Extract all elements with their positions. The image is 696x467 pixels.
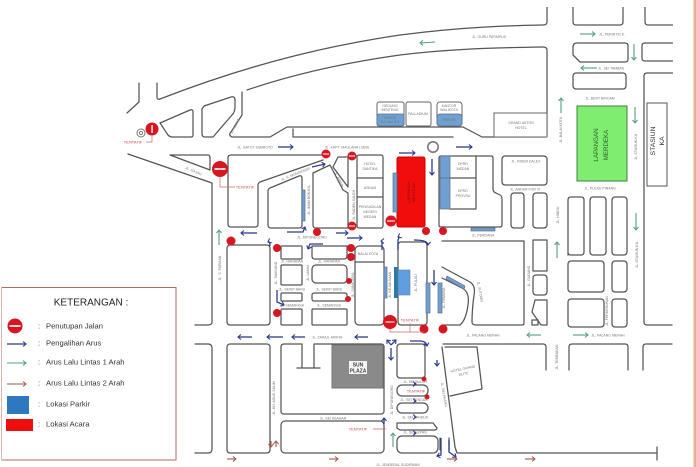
legend: road closure: [8, 318, 103, 334]
street labels: JL. PALANG MERAH: [591, 334, 625, 338]
building: Hotel Santika: SANTIKA: [363, 167, 378, 171]
street labels: JL. SEPAT: [229, 118, 241, 135]
green field: Lapangan Merdeka: LAPANGAN: [593, 128, 600, 162]
street labels: JL. PULAU: [414, 274, 418, 292]
street labels: JL. ANDER FOR VI: [510, 188, 540, 192]
street labels: JL. SEI TANDUK: [402, 416, 429, 420]
street labels: JL. DIPONEGORO: [390, 385, 394, 415]
building: Kantor Walikota: PARKIR: [443, 118, 456, 122]
legend: diversion arrow: [7, 338, 102, 348]
building: Pengadilan Negeri Medan: MEDAN: [364, 215, 377, 219]
street labels: [185, 32, 639, 467]
building: Hotel Santika: [363, 162, 378, 171]
street labels: JL. SEI TAMBAS: [598, 66, 625, 70]
two-way arrows: [227, 441, 535, 459]
building: Gedung Benteng: PARKIR: [384, 116, 397, 120]
street labels: JL. PERINTIS K.: [599, 32, 625, 36]
street labels: JL. S. PARMAN: [218, 255, 222, 280]
street labels: JL. KAPT. MAULANA LUBIS: [325, 146, 370, 150]
street labels: JL. BENT BIROAM: [585, 96, 615, 100]
street labels: HOTEL GRAND: [450, 364, 476, 374]
building: Pengadilan Negeri Medan: NEGERI: [363, 210, 377, 214]
building: Askam: ASKAM: [364, 186, 376, 190]
legend: one-way arrow: [7, 358, 125, 366]
closure markers small: [226, 150, 448, 400]
street labels: BALAI KOTA: [358, 252, 379, 256]
street labels: JL. SEKIP BARU: [279, 288, 306, 292]
tentatif callouts: TENTATIF: [124, 140, 143, 144]
street labels: JL. KH. AGUS SALIM: [272, 381, 276, 415]
building: Kantor Walikota: WALIKOTA: [440, 108, 459, 112]
legend: road closure: :: [38, 322, 40, 330]
street labels: JL. SEI ASAHAN: [320, 416, 347, 420]
Stasiun KA box: [647, 103, 667, 186]
Sun Plaza: PLAZA: [350, 368, 367, 374]
street labels: JL. LIMAU: [306, 264, 310, 281]
event location red block: LAPANGAN: [406, 181, 411, 203]
building: Hotel Santika: HOTEL: [364, 162, 376, 166]
street labels: ELITE: [459, 371, 470, 377]
Stasiun KA box: KA: [659, 136, 666, 146]
street labels: JL. SEMANGGI: [280, 304, 304, 308]
legend: two-way arrow: :: [38, 378, 40, 388]
street labels: JL. IMAM BONJOL: [307, 185, 311, 215]
building: Gedung Benteng: GEDUNG: [382, 104, 398, 108]
street labels: JL. BALAI KOTA: [559, 116, 563, 143]
legend: one-way arrow: Arus Lalu Lintas 1 Arah: [46, 358, 125, 366]
diversion arrows: [238, 147, 472, 457]
building: Palladium: [406, 102, 431, 126]
street labels: JL. GURU PATIMPUS: [472, 35, 507, 39]
one-way arrows: [219, 34, 636, 447]
street labels: JL. GUDANG: [527, 265, 531, 287]
street labels: JL. SEI BULUH: [403, 380, 428, 384]
tentatif callouts: TENTATIF: [407, 388, 426, 394]
building: Grand Aston Hotel: GRAND ASTON: [508, 121, 534, 125]
building: Gedung Benteng: [377, 102, 404, 126]
legend: one-way arrow: :: [38, 358, 40, 366]
street labels: JL. S. MONGINSIDI: [280, 166, 311, 182]
legend: diversion arrow: Pengalihan Arus: [46, 338, 102, 348]
street labels: JL. PALANG MERAH: [466, 334, 500, 338]
legend: parking: :: [38, 400, 40, 408]
closure marker at Jl. Gajah: [212, 161, 228, 177]
page edge border: [694, 0, 696, 467]
street labels: JL. PERKEBUNAN: [605, 296, 609, 326]
Sun Plaza: SUN: [353, 362, 364, 368]
street labels: JL. HARAPAN: [281, 260, 304, 264]
building: DPRD Medan: [457, 162, 470, 171]
building: Gedung Benteng: R.2 dan R.4: [381, 120, 399, 124]
legend: diversion arrow: :: [38, 338, 40, 348]
building: DPRD Provsu: PROVSU: [456, 194, 471, 198]
building boxes: [377, 102, 547, 137]
road network: [127, 7, 673, 460]
Sun Plaza: [332, 345, 383, 388]
street labels: JL. TEMBAKAU: [555, 344, 559, 369]
street labels: JL. SEI LEPAN: [403, 430, 427, 434]
building: Pengadilan Negeri Medan: [359, 205, 382, 219]
green field: Lapangan Merdeka: MERDEKA: [603, 129, 610, 160]
tentatif callouts: TENTATIF: [349, 426, 368, 432]
street labels: JL. GAJAH: [185, 166, 203, 177]
street labels: JL. PERDANA: [472, 234, 495, 238]
street labels: JL. HARAPAN: [318, 260, 341, 264]
legend title: KETERANGAN :: [54, 298, 128, 308]
street labels: JL. STASIUN KA: [634, 133, 638, 160]
street labels: JL. RIDER DALEX: [512, 160, 541, 164]
legend: parking: [7, 396, 90, 414]
street labels: JL. ARIFIN: [334, 171, 344, 189]
street labels: JL. ZAINUL ARIFIN: [312, 336, 343, 340]
closure marker at far left junction: [146, 122, 158, 136]
legend: event: [6, 419, 90, 431]
street labels: JL. HINDU: [556, 206, 560, 223]
street labels: JL. SUMATERA: [351, 272, 355, 297]
building: DPRD Medan: MEDAN: [457, 167, 470, 171]
building: Grand Aston Hotel: HOTEL: [515, 126, 527, 130]
Stasiun KA box: STASIUN: [650, 126, 657, 155]
street labels: JL. SEI RENGAS: [400, 398, 428, 402]
street labels: JL. DIPONEGORO: [297, 236, 327, 240]
event location red block: [397, 157, 425, 227]
building: DPRD Provsu: DPRD: [458, 189, 468, 193]
street labels: JL. SEKIP BARU: [316, 288, 343, 292]
street labels: JL. PULAU PINANG: [584, 186, 616, 190]
parking areas: [302, 156, 495, 313]
roundabout: [428, 142, 438, 152]
street labels: JL. SEMANGGI: [317, 304, 341, 308]
street labels: JL. RADEN SALEH: [352, 189, 356, 220]
building: Kantor Walikota: KANTOR: [442, 104, 457, 108]
street labels: JL. TAMSUND: [274, 261, 278, 284]
small roundabout: [137, 129, 145, 137]
street labels: JL. BELAKANG: [440, 382, 448, 408]
building: Kantor Walikota: [437, 102, 462, 126]
street labels: JL. STASIUN KA: [635, 241, 639, 268]
building: Gedung Benteng: BENTENG: [382, 108, 399, 112]
building: Palladium: PALLADIUM: [408, 112, 428, 116]
tentatif callouts: TENTATIF: [236, 184, 255, 190]
legend: two-way arrow: Arus Lalu Lintas 2 Arah: [46, 378, 125, 388]
building: DPRD Medan: DPRD: [458, 162, 468, 166]
legend panel: [2, 288, 176, 460]
street labels: JL. JENDERAL SUDIRMAN: [376, 463, 420, 467]
street labels: JL. SUTOMO: [476, 281, 484, 303]
event location red block: BENTENG: [411, 182, 416, 202]
green field: Lapangan Merdeka: [577, 106, 627, 181]
tentatif callouts: [124, 135, 426, 432]
tentatif callouts: TENTATIF: [401, 318, 420, 322]
building: Grand Aston Hotel: [494, 113, 547, 137]
legend: parking: Lokasi Parkir: [46, 400, 90, 408]
legend: event: Lokasi Acara: [46, 420, 90, 428]
street labels: JL. KEJAKSAAN: [388, 271, 392, 298]
street labels: JL. PEMUDA: [442, 287, 446, 308]
road closures: [146, 122, 448, 400]
legend: road closure: Penutupan Jalan: [46, 322, 103, 330]
building: Pengadilan Negeri Medan: PENGADILAN: [359, 205, 382, 209]
legend: event: :: [38, 420, 40, 428]
building: DPRD Provsu: [456, 189, 471, 198]
street labels: JL. GATOT SUBROTO: [237, 146, 273, 150]
legend: two-way arrow: [7, 378, 125, 388]
